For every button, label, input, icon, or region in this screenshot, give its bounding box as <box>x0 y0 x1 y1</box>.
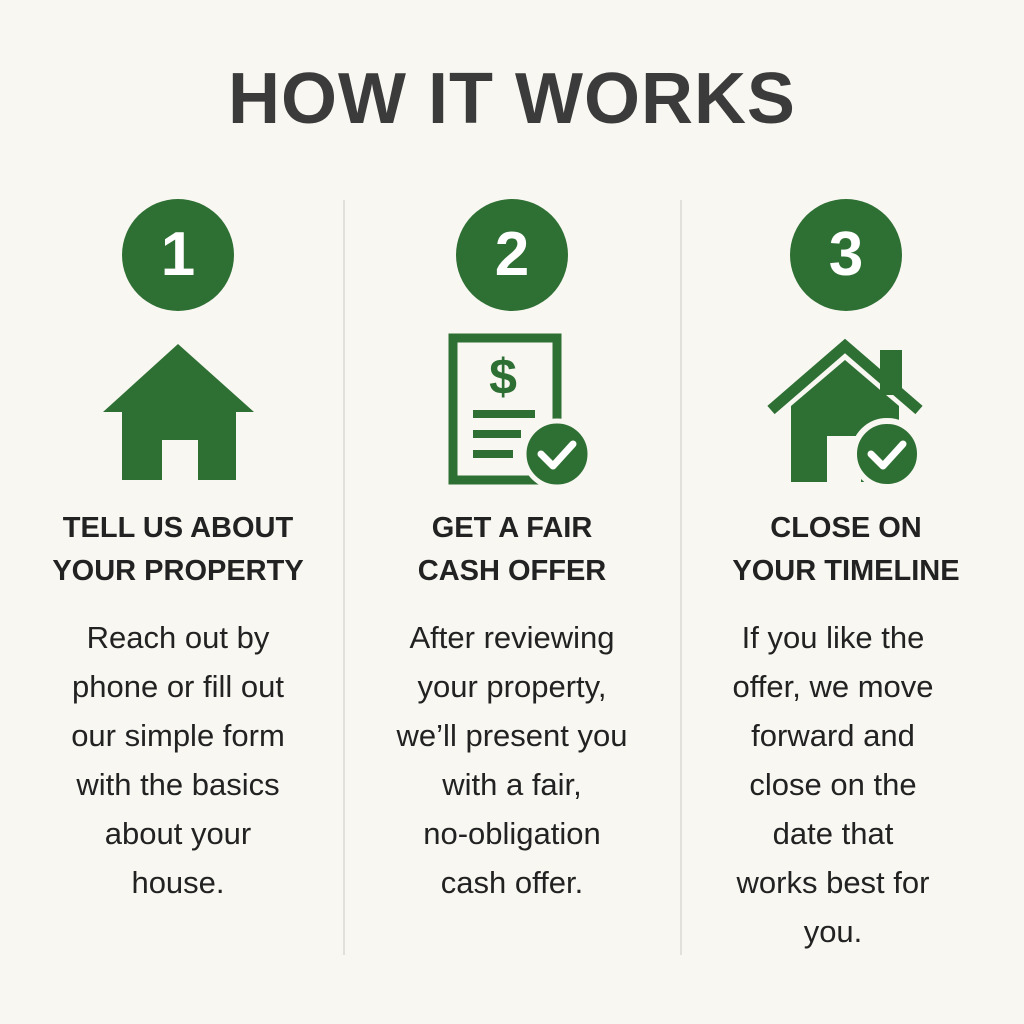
step 3 number <box>790 199 902 311</box>
body 1 <box>71 620 285 900</box>
body 3: forward and <box>751 718 915 753</box>
step 2 number: 2 <box>495 220 529 289</box>
body 1: with the basics <box>76 767 280 802</box>
step 1 number <box>122 199 234 311</box>
body 2: After reviewing <box>409 620 615 655</box>
heading 2 <box>418 512 606 587</box>
body 2 <box>396 620 627 900</box>
icon: house with check <box>768 338 922 484</box>
body 2: no-obligation <box>423 816 601 851</box>
heading 3 <box>732 512 960 587</box>
body 3 <box>732 620 934 949</box>
body 2: we’ll present you <box>397 718 627 753</box>
body 3: If you like the <box>742 620 924 655</box>
body 2: your property, <box>418 669 606 704</box>
step 1 number: 1 <box>161 220 195 289</box>
heading 2: CASH OFFER <box>418 555 606 587</box>
body 3: date that <box>773 816 893 851</box>
body 2: cash offer. <box>441 865 583 900</box>
heading 3: CLOSE ON <box>770 512 922 544</box>
heading 1: TELL US ABOUT <box>63 512 293 544</box>
step 3 number: 3 <box>829 220 863 289</box>
icon: document with dollar and check <box>448 334 588 484</box>
body 1: about your <box>105 816 251 851</box>
body 1: house. <box>131 865 225 900</box>
body 1: phone or fill out <box>72 669 284 704</box>
body 3: works best for <box>737 865 929 900</box>
title: HOW IT WORKS <box>228 59 796 139</box>
body 2: with a fair, <box>442 767 582 802</box>
heading 1 <box>52 512 304 587</box>
icon: house <box>103 344 254 480</box>
body 1: our simple form <box>71 718 285 753</box>
body 1: Reach out by <box>87 620 269 655</box>
heading 2: GET A FAIR <box>432 512 592 544</box>
icon: document with dollar and check: $ <box>489 349 517 405</box>
heading 1: YOUR PROPERTY <box>52 555 304 587</box>
step 2 number <box>456 199 568 311</box>
heading 3: YOUR TIMELINE <box>732 555 960 587</box>
body 3: close on the <box>749 767 917 802</box>
body 3: offer, we move <box>732 669 934 704</box>
body 3: you. <box>804 914 862 949</box>
